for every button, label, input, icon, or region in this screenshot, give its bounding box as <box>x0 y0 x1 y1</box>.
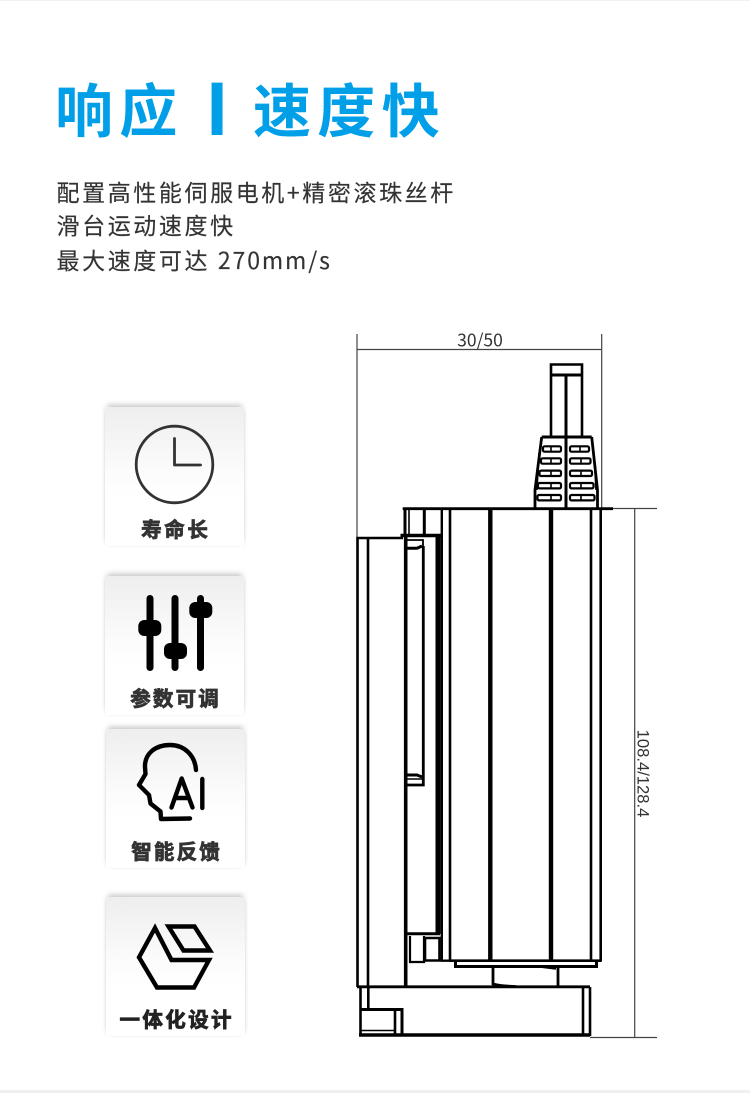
panel: feature card long life <box>105 407 244 546</box>
connector plug <box>535 364 598 508</box>
base block <box>357 987 590 1036</box>
bottom edge band <box>0 1090 750 1093</box>
motor body <box>403 509 613 986</box>
title: I <box>206 67 228 152</box>
panel: feature card integrated design <box>106 897 245 1036</box>
text block: description: 最大速度可达 270mm/s <box>56 242 332 276</box>
title: 速度快 <box>253 65 446 149</box>
icon: AI head <box>136 742 204 822</box>
icon: cube <box>136 923 214 990</box>
text block: description: 滑台运动速度快 <box>56 207 236 241</box>
label: adjustable parameters: 参数可调 <box>130 682 221 712</box>
panel: feature card smart feedback <box>106 729 245 868</box>
title: 响应 <box>55 65 184 149</box>
icon: clock <box>134 424 214 504</box>
panel: feature card adjustable parameters <box>105 576 244 715</box>
text block: description: 配置高性能伺服电机+精密滚珠丝杆 <box>56 174 456 208</box>
top edge band <box>0 0 750 1</box>
dimension: width 30/50 <box>357 328 602 540</box>
dimension: width 30/50: 30/50 <box>457 328 503 352</box>
slider carriage <box>358 509 450 987</box>
icon: sliders <box>138 595 212 671</box>
label: integrated design: 一体化设计 <box>119 1003 234 1033</box>
label: smart feedback: 智能反馈 <box>131 835 222 865</box>
text block: description <box>56 174 456 276</box>
dimension: height 108.4/128.4 <box>590 508 657 1038</box>
title <box>55 65 446 152</box>
label: long life: 寿命长 <box>141 513 210 543</box>
dimension: height 108.4/128.4: 108.4/128.4 <box>634 730 652 817</box>
